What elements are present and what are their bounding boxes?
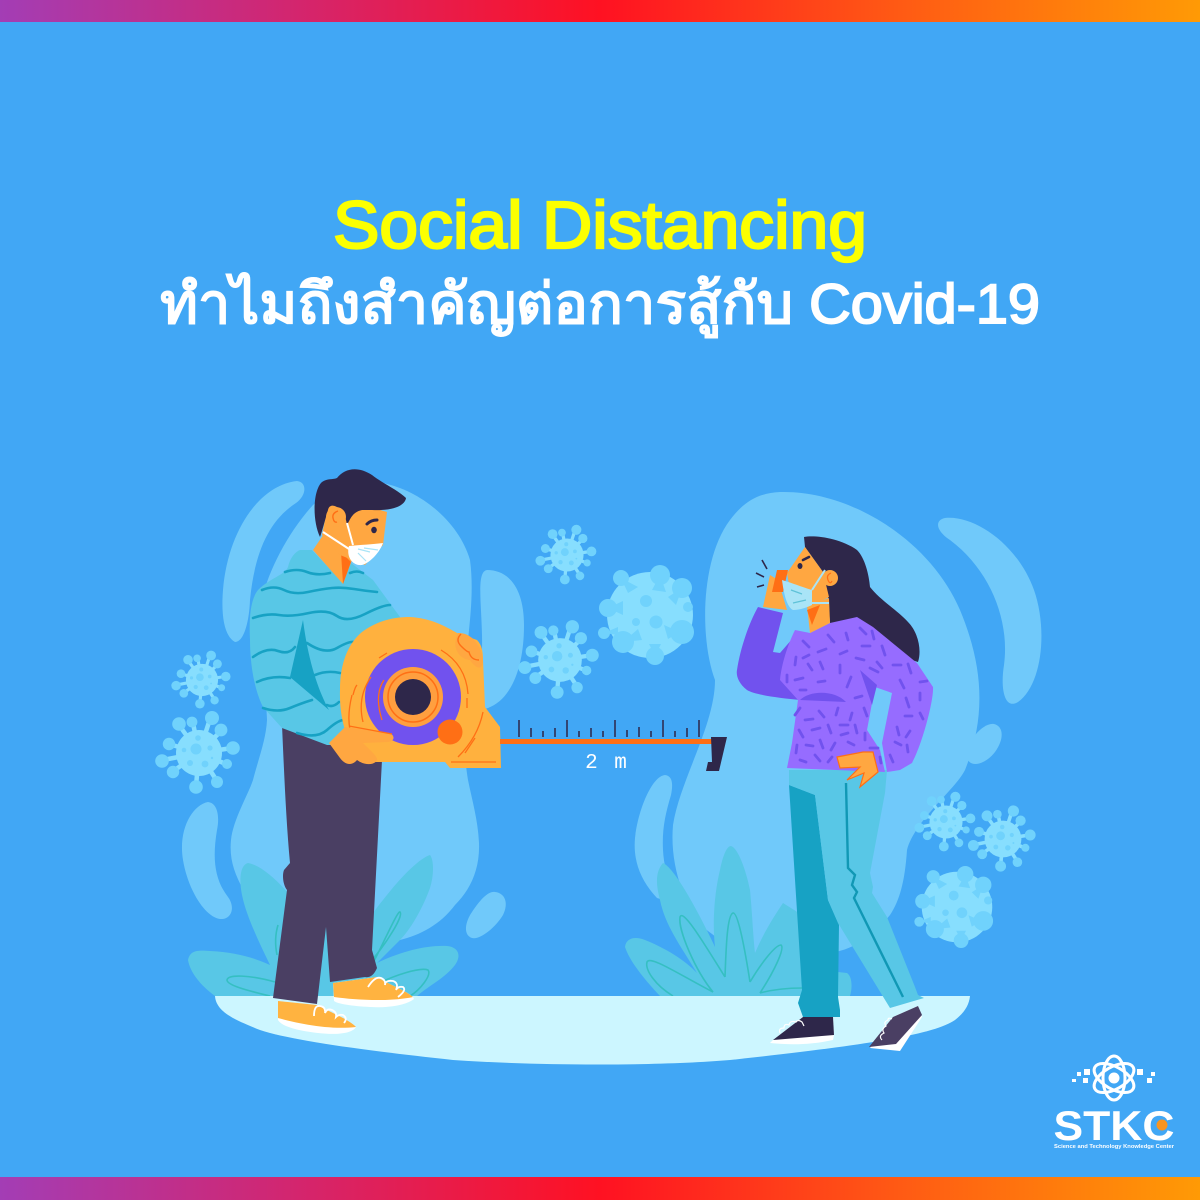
woman: front leg: [789, 770, 924, 1008]
tape hook: [706, 737, 727, 771]
man: back shoe: [333, 977, 414, 1007]
man: sweater fold: [290, 620, 329, 710]
tape body: [340, 617, 501, 768]
woman: neck: [807, 598, 830, 633]
ground: [215, 996, 970, 1064]
subtitle: ทำไมถึงสำคัญต่อการสู้กับ Covid-19: [160, 272, 1040, 338]
woman: face: [787, 547, 829, 606]
logo tagline: Science and Technology Knowledge Center: [1054, 1144, 1175, 1150]
woman: hand and phone: [763, 575, 787, 610]
title: Social Distancing: [333, 188, 867, 263]
man: lower hand: [329, 727, 394, 764]
plants right: [625, 846, 852, 996]
woman: hand on hip: [837, 752, 878, 787]
woman: speech lines: [756, 560, 767, 587]
tape ticks: [519, 720, 699, 737]
woman figure: [737, 536, 933, 1051]
tape measure: [329, 617, 727, 775]
tape button: [438, 720, 462, 744]
man: face: [322, 495, 387, 565]
woman: right shoe: [870, 1006, 922, 1051]
man: trousers: [273, 725, 383, 1004]
man figure: [250, 469, 414, 1034]
logo letters: STKC: [1054, 1102, 1174, 1149]
man: front shoe: [278, 1001, 356, 1034]
tape blade: [500, 739, 712, 744]
woman: left shoe: [770, 1017, 834, 1044]
plants left: [188, 855, 458, 996]
man: neck: [313, 528, 352, 584]
background blobs: [182, 481, 1041, 955]
top gradient bar: [0, 0, 1200, 22]
logo: [1054, 1056, 1175, 1150]
woman: sweater flecks: [787, 628, 927, 763]
man: hair: [315, 469, 406, 537]
logo atom icon: [1089, 1056, 1139, 1100]
woman: raised arm: [737, 607, 810, 700]
woman: back leg: [789, 785, 840, 1017]
woman: mask: [782, 580, 812, 610]
woman: hair: [804, 536, 920, 662]
man: upper hand: [455, 633, 483, 668]
tape purple ring: [365, 649, 461, 745]
distance label: 2 m: [585, 752, 629, 775]
woman: sweater: [780, 617, 933, 772]
man: sweater: [250, 550, 410, 745]
viruses: [155, 525, 1036, 948]
man: mask: [348, 543, 383, 565]
bottom gradient bar: [0, 1177, 1200, 1200]
